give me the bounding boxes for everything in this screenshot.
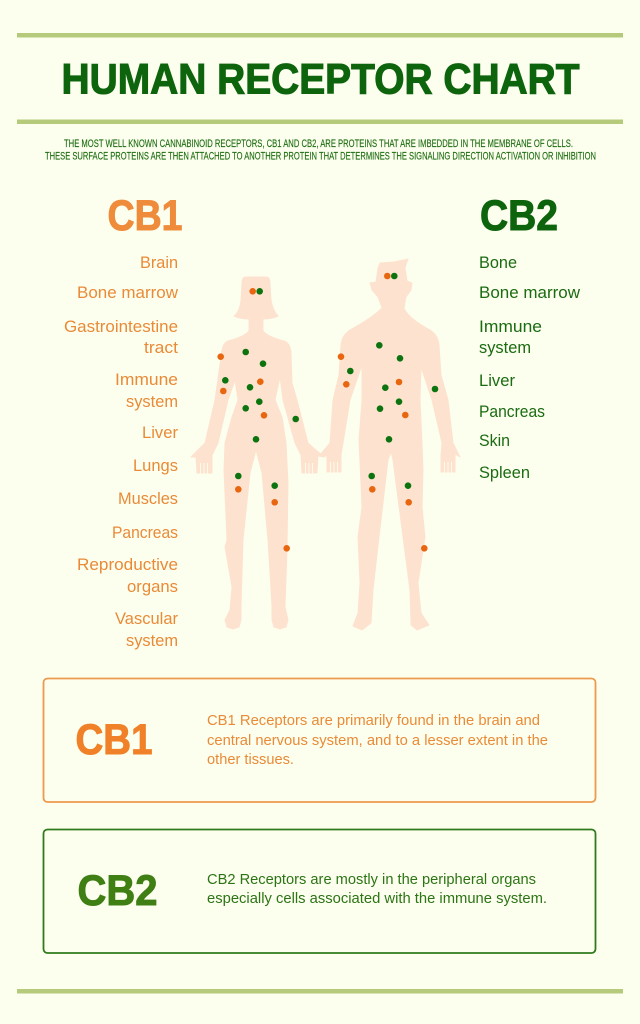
CB2 organ list: Bone — [479, 253, 517, 272]
male figure — [320, 259, 460, 630]
CB1 organ list — [64, 253, 179, 650]
CB2 organ list: Bone marrow — [479, 283, 581, 302]
bottom rule — [17, 989, 623, 994]
CB1 organ list: system — [126, 392, 178, 411]
CB1 organ list: Vascular — [115, 609, 178, 628]
CB2 description — [207, 872, 547, 907]
title: HUMAN RECEPTOR CHART — [62, 56, 580, 104]
intro text — [45, 138, 596, 162]
title rule — [17, 120, 623, 124]
panel: CB1 — [44, 678, 596, 802]
CB1 heading: CB1 — [108, 192, 182, 240]
CB1 organ list: Brain — [140, 253, 178, 272]
receptor dots: male — [338, 273, 438, 552]
CB2 organ list: Pancreas — [479, 402, 545, 421]
CB1 organ list: Liver — [142, 423, 178, 442]
CB1 organ list: Gastrointestine — [64, 317, 178, 336]
CB2 organ list: Skin — [479, 431, 510, 450]
top rule — [17, 33, 623, 38]
CB1 organ list: Immune — [115, 370, 178, 389]
CB1 organ list: tract — [144, 338, 178, 357]
CB1 panel label: CB1 — [76, 716, 152, 764]
CB2 heading: CB2 — [480, 192, 558, 240]
CB1 organ list: system — [126, 631, 178, 650]
CB1 organ list: Lungs — [133, 456, 178, 475]
panel: CB2 — [44, 830, 596, 953]
CB2 panel label: CB2 — [78, 867, 158, 915]
CB1 description: CB1 Receptors are primarily found in the brain and — [207, 713, 540, 729]
CB2 organ list — [479, 253, 581, 482]
CB1 organ list: Bone marrow — [77, 283, 179, 302]
CB2 organ list: Liver — [479, 371, 515, 390]
CB1 organ list: Reproductive — [77, 555, 178, 574]
CB1 description: central nervous system, and to a lesser extent in the — [207, 733, 548, 749]
CB2 description: especially cells associated with the immune system. — [207, 891, 547, 907]
CB2 organ list: Spleen — [479, 463, 530, 482]
CB2 organ list: system — [479, 338, 531, 357]
CB1 organ list: Pancreas — [112, 523, 178, 542]
CB1 organ list: organs — [127, 577, 178, 596]
CB1 description: other tissues. — [207, 752, 294, 768]
receptor dots: female — [217, 288, 299, 552]
CB2 organ list: Immune — [479, 317, 542, 336]
CB1 organ list: Muscles — [118, 489, 178, 508]
female figure — [191, 277, 325, 629]
CB1 description — [207, 713, 548, 768]
CB2 description: CB2 Receptors are mostly in the peripheral organs — [207, 872, 536, 888]
